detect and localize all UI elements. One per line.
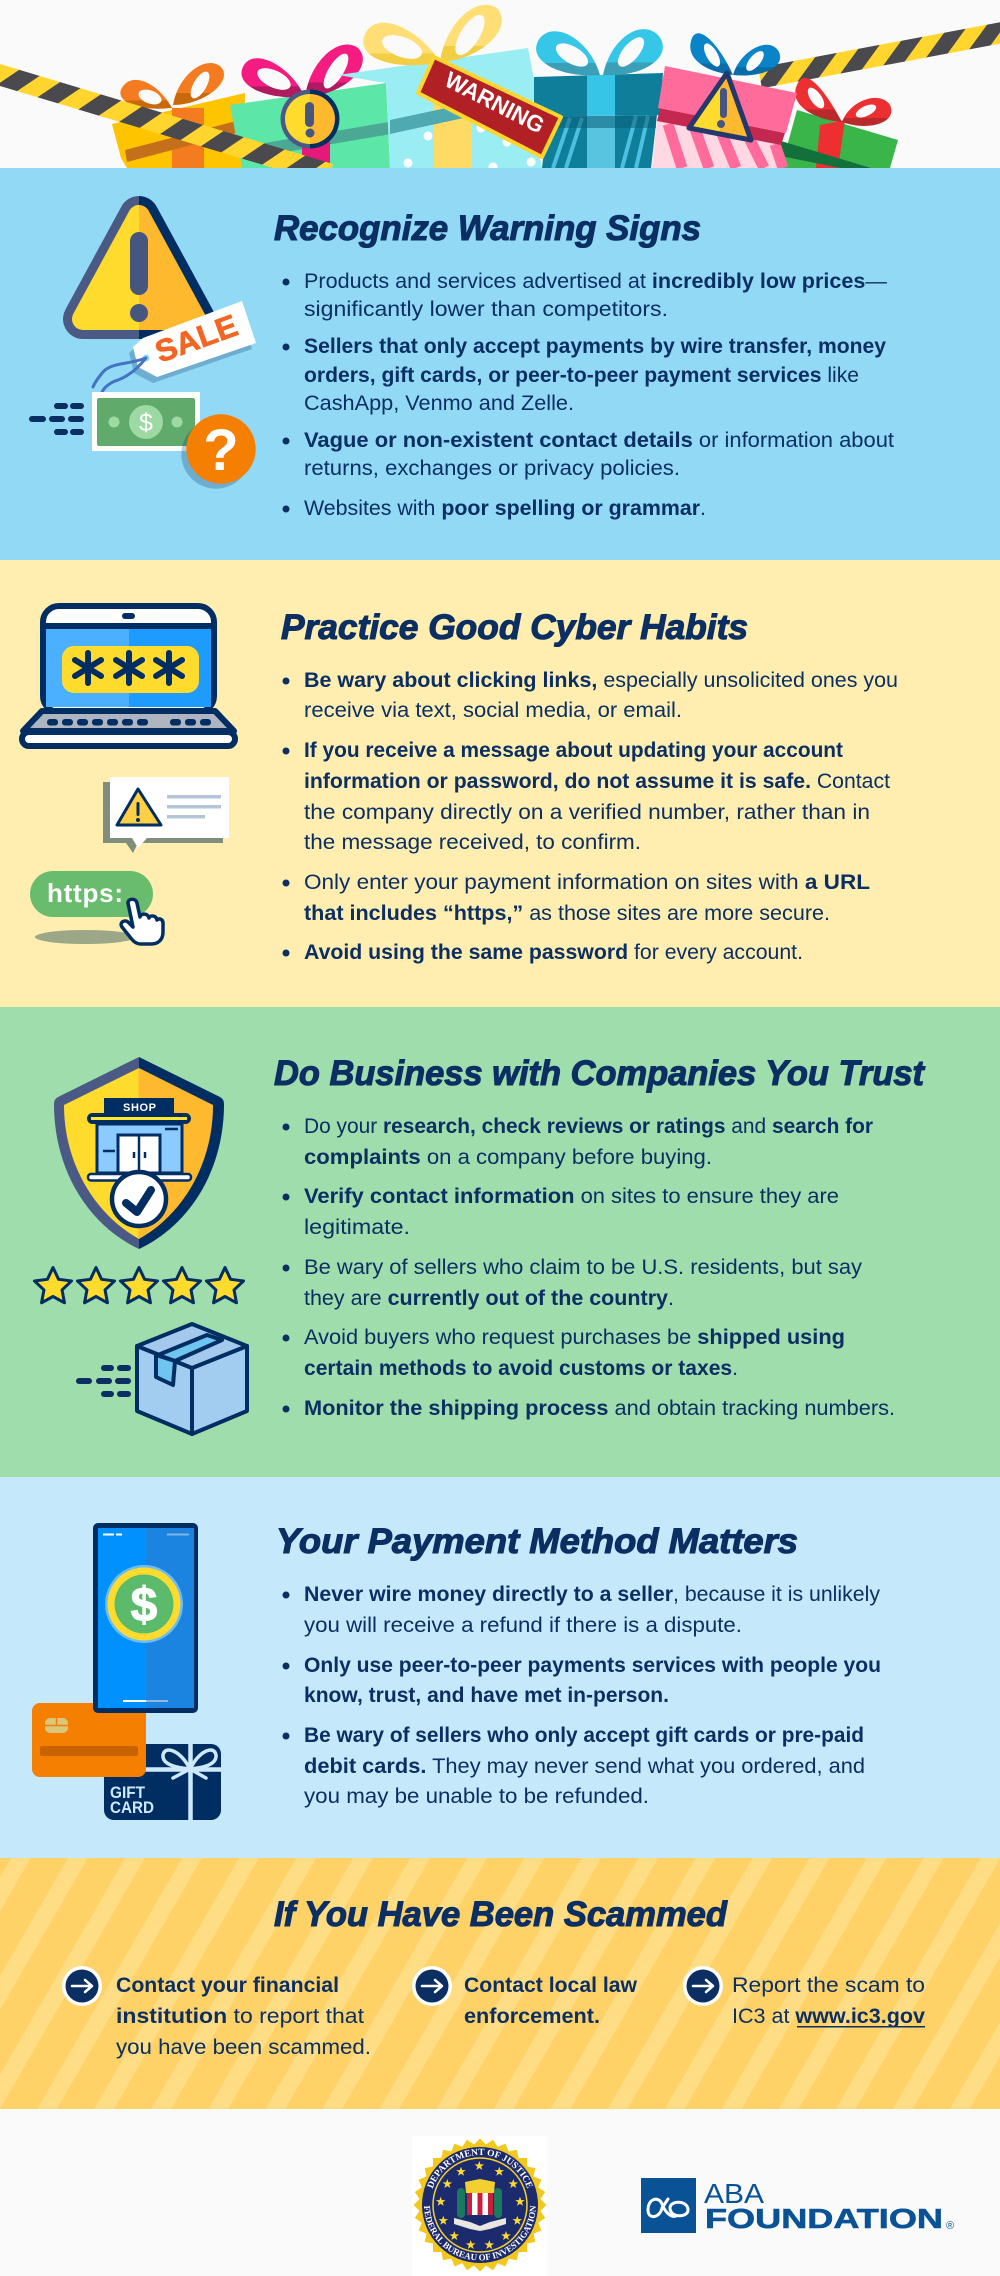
bullet: clicking links [282,668,898,722]
icon: pointing hand [121,899,163,944]
logo: ABA Foundation: ® [946,2220,954,2232]
warning sign: WARNING [441,66,549,138]
bullet: peer to peer: Only use peer-to-peer payments services with people you [304,1653,881,1677]
logo: ABA Foundation [641,2178,954,2234]
bullet: payment types: CashApp, Venmo and Zelle. [304,391,574,415]
gift: light cyan box [338,5,542,172]
icon: sale tag: SALE [150,308,242,370]
bullet: research [282,1114,874,1169]
bullet: tracking: Monitor the shipping process and obtain tracking numbers. [304,1396,895,1420]
icon: dollar bill: $ [139,409,153,437]
bullet: clicking links: Be wary about clicking links, especially unsolicited ones you [304,668,898,692]
bullet: gift cards: debit cards. They may never send what you ordered, and [304,1754,865,1778]
bullet: contact details: Vague or non-existent contact details or information about [304,428,894,452]
icon: alert message card [103,777,229,853]
step: report to IC3: IC3 at www.ic3.gov [732,2004,925,2028]
bullet: peer to peer: know, trust, and have met in-person. [304,1683,669,1707]
icon: speed lines [76,1365,131,1397]
step: contact local law enforcement: enforcement. [464,2004,600,2028]
icon: gift card [104,1744,221,1820]
panel: practice good cyber habits [0,560,1000,1007]
gift: pink box with warning triangle [652,33,797,168]
bullet: account messages: If you receive a message about updating your account [304,738,843,762]
bullet: spelling: Websites with poor spelling or grammar. [304,496,706,520]
bullet: wire money [282,1582,880,1637]
bullet: gift cards: you may be unable to be refunded. [304,1784,649,1808]
icon: speed lines [29,403,84,435]
heading: If You Have Been Scammed [274,1895,728,1934]
caution tape right [760,32,1000,78]
icon: five star rating [34,1268,244,1303]
bullet: shipping methods [282,1325,845,1380]
logo: ABA Foundation: ABA [704,2178,764,2209]
bullet: https sites [282,870,870,925]
bullet: peer to peer [282,1653,881,1707]
bullet: low prices: Products and services advertised at incredibly low prices— [304,269,888,293]
icon: smartphone with coin: $ [131,1579,158,1632]
footer panel [414,2138,954,2272]
step: contact financial institution: you have been scammed. [116,2035,371,2059]
step: report to IC3: Report the scam to [732,1973,925,1997]
panel: recognize warning signs [0,168,1000,560]
step: contact financial institution: institution to report that [116,2004,364,2028]
icon: https button [30,871,153,944]
caution tape left [0,74,330,174]
bullet: passwords: Avoid using the same password for every account. [304,940,803,964]
logo: FBI seal: DEPARTMENT OF JUSTICE [426,2148,533,2189]
gift: teal box [534,29,663,168]
bullet: https sites: Only enter your payment information on sites with a URL [304,870,870,894]
step: contact financial institution [62,1966,371,2059]
heading: Recognize Warning Signs [274,209,701,248]
icon: sale tag [93,301,256,392]
gift: yellow box [112,63,245,168]
icon: warning triangle [83,216,195,322]
heading: Do Business with Companies You Trust [274,1054,925,1093]
bullet: out of country [282,1255,862,1310]
panel: if you have been scammed [0,1858,1000,2109]
bullet: research: Do your research, check reviews or ratings and search for [304,1114,874,1138]
bullet: verify contact: Verify contact information on sites to ensure they are [304,1184,839,1208]
panel: your payment method matters [0,1477,1000,1858]
logo: FBI seal: FEDERAL BUREAU OF INVESTIGATION [424,2206,536,2260]
bullet: wire money: you will receive a refund if there is a dispute. [304,1613,742,1637]
icon: question mark badge [181,414,256,489]
icon: gift card: CARD [110,1799,154,1817]
icon: https button: https: [47,878,123,908]
gift: green box with alert badge [230,45,391,168]
bullet: out of country: they are currently out of the country. [304,1286,674,1310]
bullet: payment types: orders, gift cards, or peer-to-peer payment services like [304,363,859,387]
step: contact local law enforcement [412,1966,637,2028]
bullet: contact details [282,428,894,480]
icon: shield with shop [54,1057,224,1249]
bullet: research: complaints on a company before buying. [304,1145,712,1169]
warning sign [418,57,561,157]
icon: laptop with password [22,606,235,746]
bullet: payment types [282,334,886,415]
bullet: verify contact: legitimate. [304,1215,410,1239]
header illustration: gift boxes and caution tape [0,0,1000,174]
gift: green box right [781,78,898,168]
icon: shield with shop: SHOP [123,1102,156,1114]
step: report to IC3 [683,1966,925,2028]
panel: do business with companies you trust [0,1007,1000,1477]
bullet: gift cards: Be wary of sellers who only accept gift cards or pre-paid [304,1723,864,1747]
bullet: low prices [282,269,888,321]
heading: Your Payment Method Matters [276,1522,798,1561]
bullet: shipping methods: Avoid buyers who request purchases be shipped using [304,1325,845,1349]
bullet: account messages: the message received, to confirm. [304,830,641,854]
bullet: low prices: significantly lower than competitors. [304,297,668,321]
logo: ABA Foundation: FOUNDATION [705,2203,943,2234]
bullet: https sites: that includes “https,” as those sites are more secure. [304,901,830,925]
icon: credit card [32,1703,146,1777]
icon: shipping box [137,1324,247,1434]
step: contact financial institution: Contact your financial [116,1973,339,1997]
heading: Practice Good Cyber Habits [281,608,748,647]
icon: question mark badge: ? [203,418,239,483]
bullet: clicking links: receive via text, social media, or email. [304,698,682,722]
bullet: shipping methods: certain methods to avoid customs or taxes. [304,1356,738,1380]
logo: FBI seal [414,2138,546,2272]
bullet: payment types: Sellers that only accept payments by wire transfer, money [304,334,886,358]
bullet: contact details: returns, exchanges or privacy policies. [304,456,680,480]
bullet: verify contact [282,1184,839,1239]
bullet: account messages: information or password, do not assume it is safe. Contact [304,769,890,793]
bullet: wire money: Never wire money directly to a seller, because it is unlikely [304,1582,880,1606]
step: contact local law enforcement: Contact local law [464,1973,637,1997]
icon: gift card: GIFT [110,1784,145,1802]
bullet: account messages: the company directly on a verified number, rather than in [304,800,870,824]
bullet: gift cards [282,1723,865,1808]
bullet: out of country: Be wary of sellers who claim to be U.S. residents, but say [304,1255,862,1279]
bullet: account messages [282,738,890,854]
icon: smartphone with coin [93,1523,198,1713]
icon: dollar bill [92,392,200,451]
